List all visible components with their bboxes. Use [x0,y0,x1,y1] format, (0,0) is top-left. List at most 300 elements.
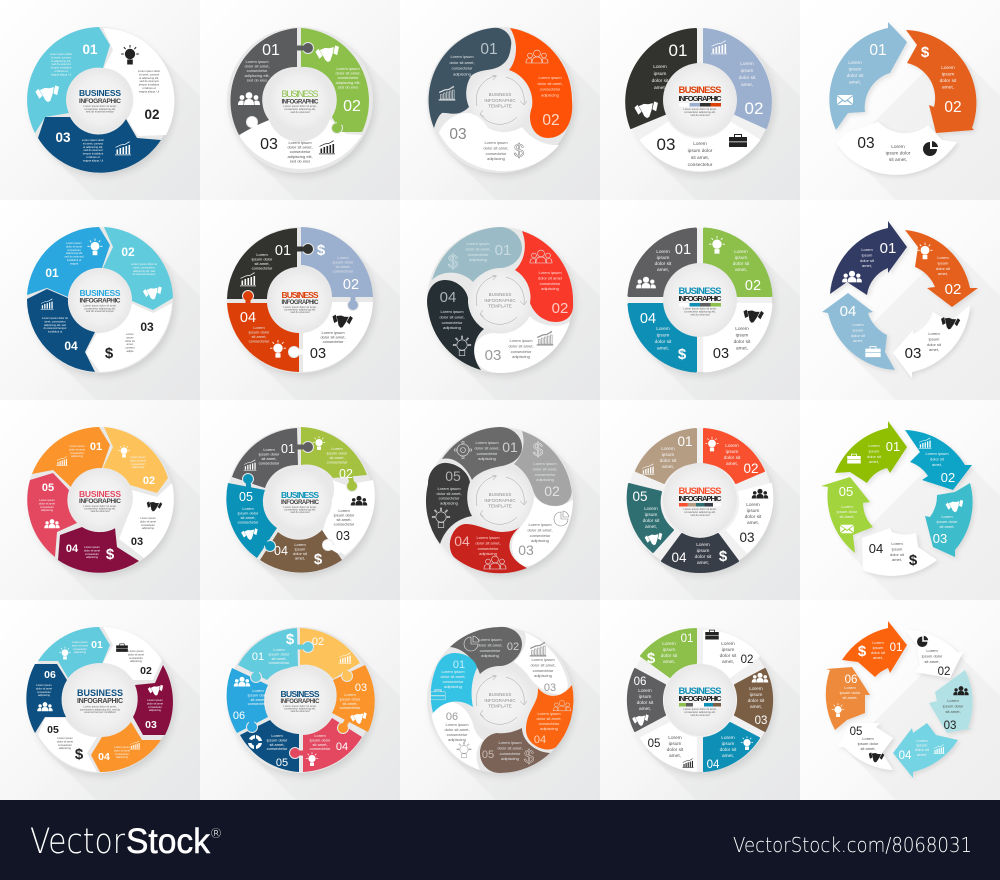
piece 02 [300,628,360,682]
lorem: dolor sit amet [72,643,88,647]
lorem: Lorem [852,322,864,327]
segment 05 [27,473,77,557]
segment 04 [450,524,527,573]
hub [663,263,737,337]
lorem: dolor sit amet [128,652,144,656]
lorem: dolor sit [720,747,737,753]
piece 01 [227,228,314,299]
lorem: adipiscing [479,551,497,556]
lorem: adipiscing [149,708,161,712]
registered mark: ® [210,827,222,842]
hub: sed do eiusmod [691,113,710,117]
segment 01 [442,427,522,480]
number 03: 03 [145,719,157,731]
icon: bulb [705,437,719,451]
tile: three swirl segments [400,0,600,200]
lorem: ipsum [722,741,734,747]
lorem: Lorem [662,641,676,647]
icon: chart [319,140,335,154]
number 03: 03 [857,135,875,152]
lorem: amet, [929,347,939,352]
lorem: Lorem [314,733,326,738]
lorem: ipsum [722,647,734,653]
icon: bulb [741,736,753,750]
lorem: dolor sit amet, [483,145,509,150]
lorem: Lorem [263,447,275,452]
segment 03 [641,123,759,170]
number 05: 05 [47,724,59,736]
lorem: consectetur [267,746,288,751]
lorem: dolor sit amet [140,519,156,523]
number 02: 02 [140,665,152,677]
icon: chart [711,40,727,54]
segment 02 [509,28,572,138]
lorem: ipsum dolor [334,512,355,518]
lorem: dolor sit amet, [449,60,475,65]
lorem: amet, consectetur [44,319,66,323]
lorem: consectetur [247,68,268,73]
segment 05 [38,718,97,772]
icon: chart [530,642,546,656]
hub: Lorem ipsum dolor sit amet, [83,504,117,508]
hub: sed do eiusmod [291,310,310,314]
piece 03 [332,665,375,734]
lorem: amet, [663,659,675,665]
lorem: sed do eiusmod [52,62,71,66]
number 04: 04 [707,759,720,771]
lorem: consectetur [290,149,311,154]
hub: Lorem ipsum dolor sit amet, [683,507,717,511]
icon: chart [642,464,654,475]
lorem: dolor sit [847,73,864,79]
lorem: dolor sit amet, [465,246,491,251]
hub: consectetur adipiscing elit, [284,107,316,111]
lorem: consectetur [439,496,460,501]
segment 04 [704,723,759,771]
piece 01 [232,428,314,488]
icon: briefcase [865,346,881,357]
icon: chart [919,438,931,449]
lorem: dolor sit amet, [474,445,500,450]
lorem: Lorem ipsum [538,75,562,80]
lorem: sit amet, [860,746,876,751]
lorem: ipsum [735,255,747,261]
lorem: Lorem ipsum [69,444,86,448]
lorem: Lorem ipsum [114,745,131,749]
piece 02 [301,28,369,134]
lorem: adipiscing [440,500,458,505]
piece 03 [240,119,362,169]
lorem: Lorem ipsum [478,637,502,642]
lorem: sit amet, [889,157,907,163]
lorem: adipiscing elit, [287,154,313,159]
hub: TEMPLATE [488,104,512,108]
lorem: consectetur [333,268,354,274]
lorem: Lorem [891,541,903,546]
icon: bulb [118,445,130,458]
lorem: Lorem [861,247,873,252]
number 02: 02 [938,666,950,678]
segment 03 [38,117,161,173]
hub: consectetur adipiscing elit, [84,506,116,510]
lorem: dolor sit amet, [439,314,465,319]
lorem: consectetur [58,743,72,747]
hub: INFOGRAPHIC [281,500,320,506]
hub: INFOGRAPHIC [80,298,121,304]
segment 01 [629,229,696,296]
number 01: 01 [890,642,902,654]
lorem: Lorem ipsum [39,498,56,502]
lorem: sed do eiusmod [84,148,103,152]
number 03: 03 [739,530,755,545]
lorem: sit amet, [261,456,277,461]
icon: chart [682,758,694,768]
hub: consectetur adipiscing elit, [84,107,116,111]
lorem: dolor sit [733,261,750,267]
lorem: dolor sit [739,75,756,81]
hub: Lorem ipsum dolor sit amet, [283,704,317,708]
lorem: sit amet, [839,514,855,519]
lorem: dolor sit amet, [440,674,466,679]
lorem: dolor sit [667,747,684,753]
number 04: 04 [274,544,288,558]
lorem: Lorem [661,446,675,452]
number 01: 01 [502,439,518,455]
lorem: Lorem [841,504,853,509]
lorem: Lorem [926,648,938,653]
lorem: Lorem [734,249,748,255]
lorem: Lorem ipsum [84,545,101,549]
lorem: ipsum [750,692,762,698]
lorem: consectetur [540,87,561,92]
arrow 03 [925,483,973,557]
icon: dollar: $ [317,242,326,259]
icon: handshake [634,101,660,120]
lorem: ipsum [747,508,759,514]
lorem: consectetur [452,66,473,71]
lorem: sit amet, [336,517,352,522]
lorem: dolor sit [643,518,660,524]
lorem: adipiscing [541,92,559,97]
hub [266,666,334,734]
icon: people [530,250,552,263]
icon: chart [439,86,455,100]
hub: Lorem ipsum dolor sit amet, [683,707,717,711]
segment 01 [27,27,110,133]
arrow 02 [905,230,978,307]
number 06: 06 [44,669,56,681]
lorem: dolor sit [851,333,866,338]
number 05: 05 [839,484,853,499]
icon: pie [923,141,938,156]
lorem: adipiscing [540,726,558,731]
lorem: consect [125,346,135,350]
hub: BUSINESS [489,492,511,497]
segment 05 [628,484,673,552]
lorem: ipsum [669,741,681,747]
lorem: dolor sit [871,650,886,655]
lorem: ipsum dolor [249,330,270,334]
icon: gear [454,442,472,458]
hub: sed do eiusmod [691,312,710,316]
hub [466,266,534,334]
icon: dollar: $ [533,440,543,460]
number 02: 02 [144,107,160,122]
lorem: ipsum [938,260,949,265]
lorem: Lorem [735,326,749,332]
lorem: Lorem ipsum dolor [138,69,160,73]
lorem: Lorem [638,688,652,694]
lorem: dolor sit [748,698,765,704]
lorem: Lorem ipsum dolor [50,52,72,56]
lorem: dolor sit amet [130,458,146,462]
lorem: adipiscing elit, [244,73,270,78]
number 02: 02 [339,467,353,481]
lorem: ipsum dolor [259,452,280,456]
lorem: consectetur [478,546,499,551]
lorem: dolor sit [695,554,712,560]
lorem: ipsum [853,327,864,332]
lorem: consectetur [248,701,269,706]
hub [663,463,737,537]
number 01: 01 [675,242,691,258]
icon: dollar: $ [858,643,867,660]
lorem: ipsum [662,452,674,458]
tile: three chevron segments [0,0,200,200]
lorem: Lorem [916,738,928,743]
tile: four puzzle pieces [200,200,440,440]
number 04: 04 [840,303,856,320]
lorem: adipiscing [478,456,496,461]
lorem: et adipiscing elit, [83,145,103,149]
number 04: 04 [240,310,256,326]
lorem: ipsum dolor [922,653,943,658]
lorem: sit amet, [250,697,266,702]
tile: six chevron segments [0,600,240,840]
number 01: 01 [252,651,264,663]
lorem: amet, consectetur [133,265,155,269]
lorem: Lorem ipsum [66,241,83,245]
lorem: dolor sit [660,458,677,464]
lorem: adipiscing elit [66,251,82,255]
number 04: 04 [454,533,470,549]
lorem: consectetur [249,338,270,344]
lorem: amet, [938,271,948,276]
lorem: adipiscing [534,673,552,678]
segment 02 [704,29,771,128]
lorem: ipsum dolor [837,509,858,514]
segment 04 [629,304,696,371]
hub: sed do eiusmod [91,509,110,513]
lorem: amet, [849,80,861,86]
number 03: 03 [310,346,326,362]
arrow 01 [835,421,907,483]
lorem: Lorem [693,141,707,147]
icon: bulb [453,336,471,356]
lorem: adipiscing [536,477,554,482]
hub: Lorem ipsum dolor sit amet, [83,104,117,108]
icon: chart [537,331,553,345]
segment 01 [626,29,696,128]
arrow 01 [829,22,907,130]
icon: dollar: $ [75,746,84,763]
number 01: 01 [681,633,693,645]
hub [466,666,534,734]
hub: BUSINESS [79,489,121,499]
hub [664,664,736,736]
icon: handshake [940,316,960,331]
number 03: 03 [657,135,675,154]
number 03: 03 [131,536,143,548]
number 01: 01 [262,42,280,59]
lorem: dolor sit [860,258,875,263]
number 03: 03 [55,130,71,145]
number 01: 01 [90,441,102,453]
icon: handshake [146,500,162,513]
lorem: sed do eiusmod [140,79,159,83]
icon: people [37,702,53,711]
arrow 04 [862,528,937,576]
number 02: 02 [743,461,759,476]
segment 03 [735,669,772,731]
icon: bulb [59,647,71,660]
segment 06 [628,669,665,731]
lorem: ipsum [873,645,884,650]
lorem: dolor sit amet, [320,334,346,340]
piece 05 [226,474,277,558]
icon: chart [244,460,256,471]
hub: BUSINESS [678,286,722,297]
segment 02 [103,427,168,493]
lorem: sit amet, [269,742,285,747]
lorem: consectetur [340,705,361,710]
hub: BUSINESS [282,89,318,99]
number 06: 06 [233,710,245,722]
icon: people [526,50,548,63]
lorem: consectetur [259,460,280,466]
number 05: 05 [445,468,461,484]
icon: chart [933,744,945,754]
lorem: Lorem [749,686,763,692]
lorem: adipiscing [444,684,462,689]
lorem: dolor sit amet, [497,745,523,750]
hub: consectetur adipiscing elit, [684,310,716,314]
hub: Lorem ipsum dolor sit amet, [83,304,117,308]
number 03: 03 [544,682,556,694]
lorem: Lorem ipsum [245,59,269,64]
lorem: dolor sit [293,551,308,556]
lorem: ipsum dolor [238,510,259,516]
hub [268,268,332,332]
segment 01 [431,653,477,713]
segment 02 [450,627,522,674]
hub: BUSINESS [79,88,121,98]
segment 02 [704,630,759,677]
lorem: consectetur [539,721,560,726]
lorem: consectetur [310,746,331,751]
lorem: adipiscing [86,555,98,559]
lorem: Lorem ipsum [538,270,562,275]
hub: BUSINESS [282,290,319,300]
number 01: 01 [886,439,900,454]
lorem: consectetur [37,690,51,694]
segment 05 [426,463,472,544]
lorem: ipsum [639,694,651,700]
lorem: adipis [126,349,134,353]
lorem: dolor sit amet, [287,145,313,150]
hub [663,63,737,137]
hub: INFOGRAPHIC [79,98,121,105]
tile: three puzzle pieces [200,0,400,200]
lorem: et adipiscing elit, [51,59,71,63]
number 02: 02 [343,98,361,115]
hub: TEMPLATE [488,504,512,508]
number 01: 01 [495,242,511,259]
lorem: amet, [662,464,674,470]
lorem: amet, [726,461,738,467]
lorem: ipsum [663,647,675,653]
lorem: Lorem [941,65,955,71]
lorem: sit amet, [254,261,270,266]
number 04: 04 [671,550,687,565]
lorem: sit amet, [842,695,858,700]
lorem: Lorem ipsum [528,522,552,527]
icon: ring [248,735,262,749]
white knob into piece 01 [246,116,258,128]
lorem: consectetur [238,520,259,524]
lorem: sit amet, [271,656,287,661]
icon: people [842,271,862,282]
lorem: Lorem [271,733,283,738]
icon: pie [554,511,569,526]
arrow 03 [893,305,970,378]
lorem: adipiscing [531,538,549,543]
number 01: 01 [880,240,896,257]
icon: handshake [632,714,650,727]
lorem: dolor sit [745,514,762,520]
segment 04 [27,289,95,372]
icon: dollar: $ [524,747,534,767]
lorem: Lorem [721,641,735,647]
icon: chart [115,141,131,155]
lorem: adipiscing [116,755,128,759]
hub: sed do eiusmod [691,513,710,517]
hub [476,74,527,124]
hub: BUSINESS [678,486,722,497]
lorem: Lorem ipsum [537,711,561,716]
hub: BUSINESS [77,688,123,698]
lorem: sit amet, [240,515,256,520]
number 04: 04 [440,289,456,306]
icon: chart [339,653,351,664]
number 05: 05 [850,726,862,738]
segment 01 [641,629,696,677]
lorem: sed do eius [338,84,358,89]
lorem: dolor sit amet, [244,64,270,69]
lorem: magna [70,262,79,265]
icon: dollar: $ [921,44,930,61]
lorem: sit amet, [329,455,345,460]
lorem: dolor sit [661,653,678,659]
arrow 02 [905,430,972,490]
number 02: 02 [944,99,962,116]
number 01: 01 [45,266,59,280]
hub: INFOGRAPHIC [282,300,319,306]
lorem: ipsum dolor [333,260,354,264]
lorem: tempor incididunt [51,66,71,70]
number 02: 02 [941,470,955,485]
segment 01 [38,627,110,678]
